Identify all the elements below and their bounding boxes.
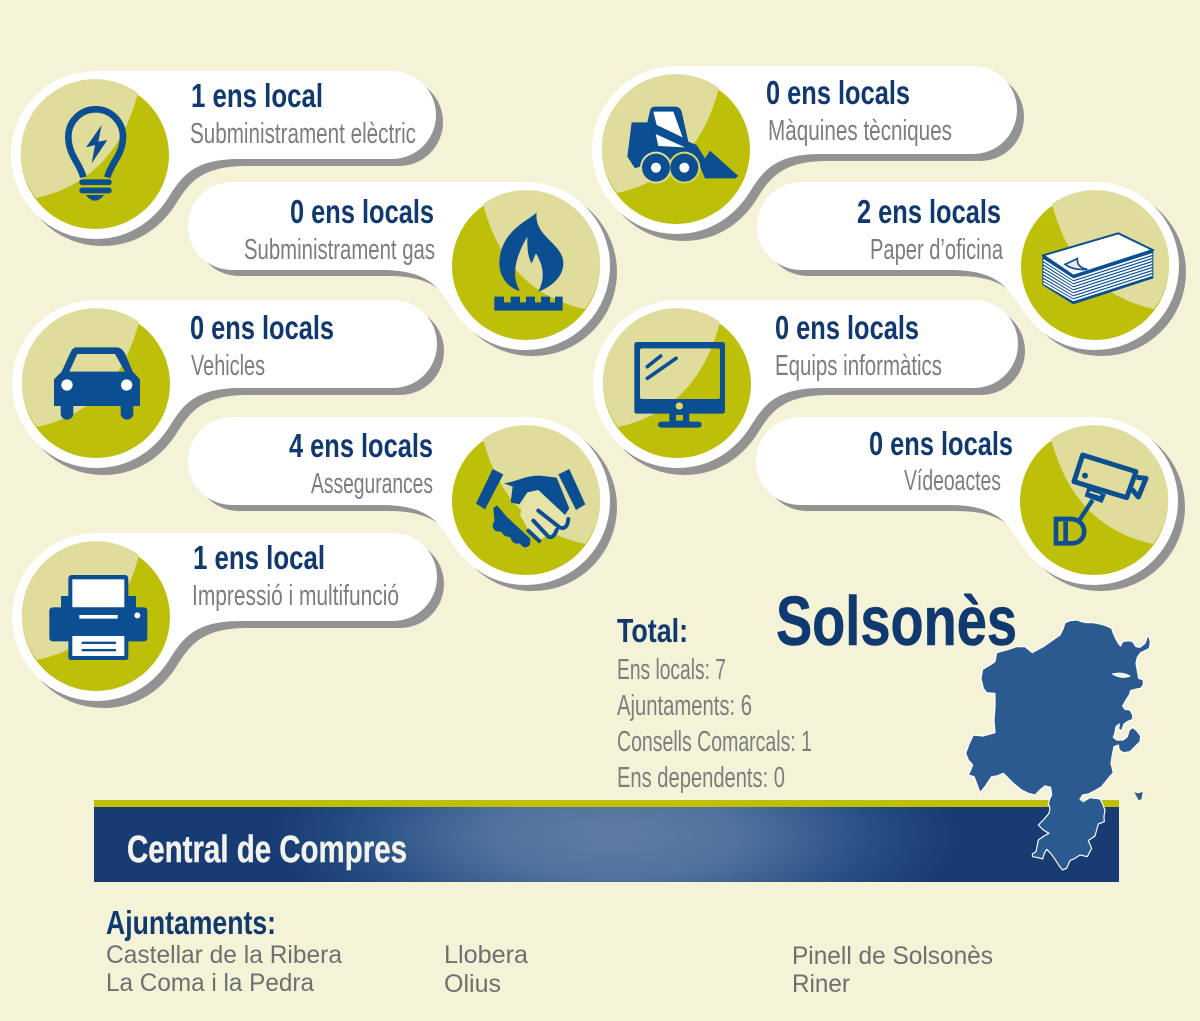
heading: 1 ens local: 1 ens local — [191, 77, 323, 114]
heading: 0 ens locals: 0 ens locals — [766, 74, 910, 111]
label: equips informàtics: Equips informàtics — [775, 350, 942, 382]
icon: light bulb — [68, 109, 123, 201]
label: impressió i multifunció: Impressió i multifunció — [192, 580, 399, 612]
text block: ajuntaments — [106, 904, 993, 998]
municipality: Llobera — [444, 941, 528, 969]
label: màquines tècniques: Màquines tècniques — [768, 115, 952, 147]
icon: handshake — [476, 469, 585, 547]
panel: vídeoactes — [756, 417, 1185, 591]
title: Solsonès: Solsonès — [776, 582, 1017, 660]
banner title: Central de Compres — [127, 829, 407, 871]
heading: 2 ens locals: 2 ens locals — [857, 193, 1001, 230]
municipality: Olius — [444, 970, 501, 998]
icon: skid loader — [627, 107, 738, 184]
heading: 0 ens locals: 0 ens locals — [190, 309, 334, 346]
icon: monitor — [634, 342, 725, 428]
ajuntaments heading: Ajuntaments: — [106, 904, 276, 941]
panel: equips informàtics — [593, 300, 1025, 475]
label: subministrament gas: Subministrament gas — [244, 234, 435, 266]
map: Solsonès — [966, 620, 1150, 870]
total: ajuntaments: Ajuntaments: 6 — [617, 690, 752, 722]
heading: 0 ens locals: 0 ens locals — [775, 309, 919, 346]
icon: video camera — [1056, 455, 1146, 543]
label: subministrament elèctric: Subministrament elèctric — [190, 118, 416, 150]
label: paper d'oficina: Paper d’oficina — [870, 234, 1004, 266]
text block: totals — [617, 612, 812, 794]
municipality: Castellar de la Ribera — [106, 941, 342, 969]
municipality: La Coma i la Pedra — [106, 969, 314, 997]
panel: paper d'oficina — [757, 182, 1186, 356]
label: vídeoactes: Vídeoactes — [904, 465, 1001, 497]
total: ens dependents: Ens dependents: 0 — [617, 762, 785, 794]
total: ens locals: Ens locals: 7 — [617, 654, 726, 686]
heading: 4 ens locals: 4 ens locals — [289, 427, 433, 464]
heading: 0 ens locals: 0 ens locals — [869, 425, 1013, 462]
banner: central de compres — [94, 800, 1119, 882]
panel: subministrament gas — [188, 182, 617, 356]
heading: 1 ens local: 1 ens local — [193, 539, 325, 576]
panel: assegurances — [188, 417, 617, 591]
totals heading: Total: — [617, 612, 688, 649]
municipality: Riner — [792, 970, 850, 998]
total: consells comarcals: Consells Comarcals: 1 — [617, 726, 812, 758]
icon: printer — [49, 575, 147, 660]
panel: impressió i multifunció — [12, 533, 444, 708]
panel: subministrament elèctric — [11, 71, 443, 246]
panel: màquines tècniques — [592, 66, 1024, 241]
icon: stack of paper — [1042, 233, 1153, 304]
icon: gas flame — [494, 212, 563, 311]
icon: car — [54, 347, 140, 420]
heading: 0 ens locals: 0 ens locals — [290, 193, 434, 230]
label: assegurances: Assegurances — [311, 468, 433, 500]
label: vehicles: Vehicles — [191, 350, 265, 382]
municipality: Pinell de Solsonès — [792, 942, 993, 970]
panel: vehicles — [12, 300, 444, 475]
